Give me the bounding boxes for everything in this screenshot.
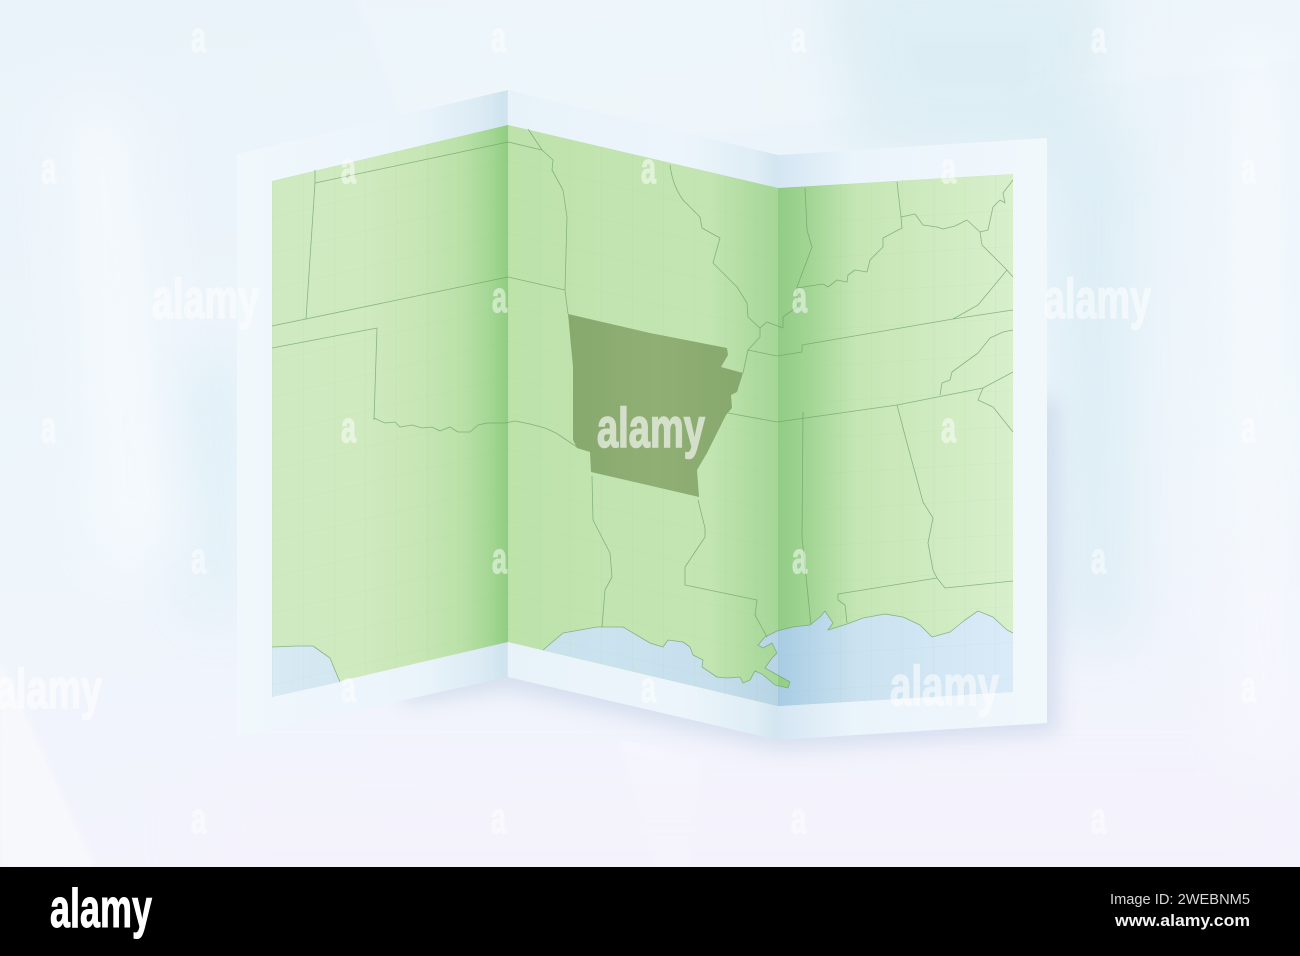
watermarks: a [1091,534,1106,583]
watermarks: a [791,794,806,843]
watermarks: a [191,794,206,843]
watermarks: a [941,144,956,193]
gulf water [272,611,1013,706]
watermarks: a [341,403,356,452]
watermarks: a [41,144,56,193]
watermarks: a [341,144,356,193]
watermarks: a [641,663,656,712]
folded paper sheet [237,90,1047,740]
watermarks: a [492,534,507,583]
watermarks: a [1091,794,1106,843]
paper shadow [400,400,1058,750]
watermarks: a [791,13,806,62]
watermarks: a [1241,144,1256,193]
watermarks: a [792,534,807,583]
watermarks: a [1091,13,1106,62]
watermarks: a [341,663,356,712]
state borders [272,129,1013,688]
watermarks: a [1241,403,1256,452]
watermarks: a [792,273,807,322]
watermarks: a [191,534,206,583]
watermarks: a [491,794,506,843]
watermarks: a [191,13,206,62]
map grid [272,125,1013,706]
watermarks: a [941,403,956,452]
watermarks: a [641,144,656,193]
image id: Image ID: 2WEBNM5 [1110,891,1250,908]
highlighted state: Arkansas [568,314,743,497]
map land area [272,125,1013,706]
footer logo: alamy [50,877,152,939]
footer bar [0,867,1300,956]
watermarks: a [1241,663,1256,712]
watermarks: a [491,13,506,62]
watermarks: alamy [152,267,259,330]
watermarks: a [492,273,507,322]
watermarks: alamy [1044,267,1151,330]
website: www.alamy.com [1114,911,1250,930]
watermarks: alamy [890,654,999,717]
watermarks: alamy [597,396,705,459]
watermarks: a [41,403,56,452]
